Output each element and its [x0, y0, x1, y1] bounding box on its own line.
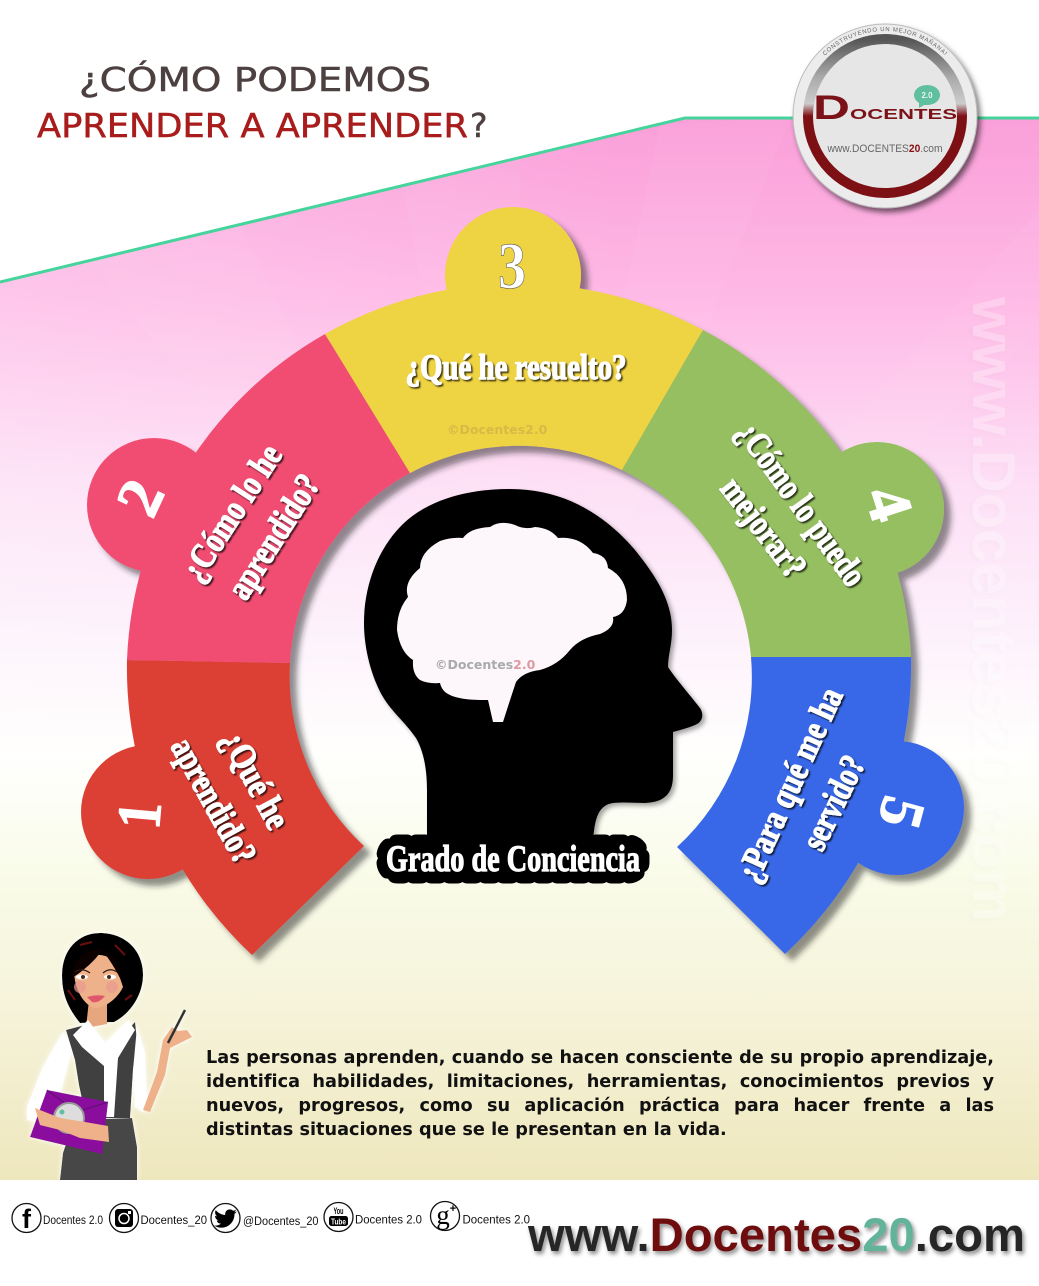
title — [37, 59, 488, 145]
segment 3: yellow: ¿Qué he resuelto? — [406, 347, 626, 387]
segment 5: blue: 5 — [864, 790, 938, 835]
footer: social google plus: Docentes 2.0 — [462, 1214, 530, 1226]
footer: social twitter: @Docentes_20 — [243, 1216, 318, 1228]
vertical watermark url: www.Docentes20.com — [960, 296, 1027, 922]
segment 4: green: 4 — [851, 477, 926, 530]
title: ¿CÓMO PODEMOS — [79, 59, 431, 99]
segment 1: red: 1 — [105, 799, 175, 832]
segment 2: pink: 2 — [103, 469, 178, 526]
icon: head silhouette with brain: ©Docentes2.0 — [435, 657, 536, 672]
segment 5: blue: ¿Para qué me ha — [728, 681, 851, 888]
footer: social google plus — [430, 1200, 530, 1230]
footer: social facebook — [12, 1204, 103, 1234]
illustration: teacher holding folder — [27, 933, 192, 1180]
segment 5: blue: servido? — [793, 749, 873, 856]
footer: social google plus: + — [450, 1203, 456, 1215]
body text paragraph — [206, 1048, 994, 1140]
segment 2: pink: aprendido? — [219, 467, 328, 606]
footer: social facebook: f — [22, 1204, 32, 1234]
logo: Docentes 2.0 badge: www.DOCENTES20.com — [827, 143, 942, 155]
footer: social twitter — [211, 1204, 318, 1232]
title: APRENDER A APRENDER — [37, 106, 468, 145]
icon: head silhouette with brain — [364, 489, 702, 845]
segment 3: yellow: ©Docentes2.0 — [447, 422, 548, 437]
segment 4: green: mejorar? — [713, 469, 815, 586]
segment 2: pink — [87, 334, 410, 663]
body text paragraph: distintas situaciones que se le presentan en la vida. — [206, 1120, 727, 1140]
segment 1: red: aprendido? — [163, 730, 265, 871]
wheel: five coloured segments — [81, 207, 964, 955]
segment 5: blue — [677, 657, 964, 954]
logo: Docentes 2.0 badge: 2.0 — [921, 91, 933, 100]
segment 2: pink: ¿Cómo lo he — [172, 437, 290, 588]
segment 1: red — [81, 660, 364, 955]
logo: Docentes 2.0 badge: CONSTRUYENDO UN MEJOR MAÑANA! — [823, 26, 948, 56]
footer: social youtube — [324, 1202, 422, 1232]
segment 1: red: ¿Qué he — [213, 723, 298, 836]
footer: social youtube: You — [334, 1206, 344, 1216]
logo: Docentes 2.0 badge — [792, 24, 984, 216]
segment 3: yellow — [325, 207, 703, 473]
body text paragraph: nuevos, progresos, como su aplicación práctica para hacer frente a las — [206, 1096, 994, 1116]
footer: social google plus: g — [436, 1200, 450, 1230]
logo: Docentes 2.0 badge: D — [813, 89, 850, 127]
logo: Docentes 2.0 badge: OCENTES — [850, 106, 957, 123]
title: ? — [470, 106, 488, 145]
footer: website url: www.Docentes20.com — [527, 1208, 1025, 1261]
footer: social instagram: Docentes_20 — [140, 1215, 207, 1227]
segment 3: yellow: 3 — [498, 230, 526, 303]
body text paragraph: Las personas aprenden, cuando se hacen consciente de su propio aprendizaje, — [206, 1048, 994, 1068]
body text paragraph: identifica habilidades, limitaciones, herramientas, conocimientos previos y — [206, 1072, 994, 1092]
footer: social facebook: Docentes 2.0 — [43, 1215, 103, 1227]
segment 4: green: ¿Cómo lo puedo — [729, 413, 875, 594]
footer: social instagram — [110, 1204, 207, 1232]
footer: social youtube: Tube — [331, 1216, 346, 1226]
footer: social youtube: Docentes 2.0 — [355, 1214, 422, 1226]
label: Grado de Conciencia: Grado de Conciencia — [386, 839, 640, 880]
segment 4: green — [622, 330, 944, 657]
